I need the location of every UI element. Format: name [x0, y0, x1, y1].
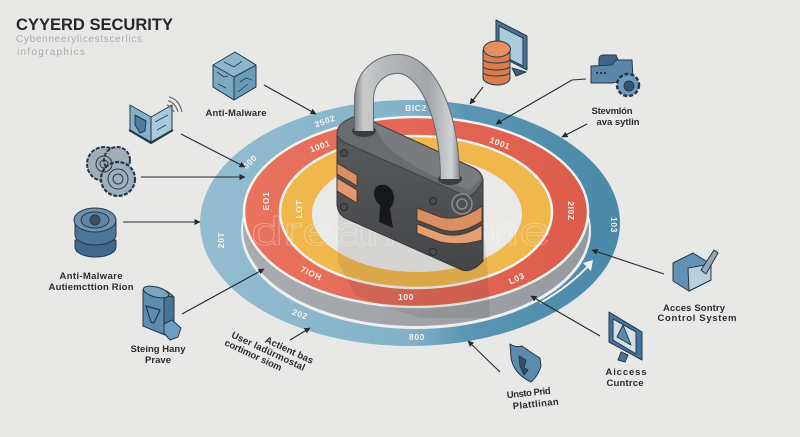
icon: circuit cube [213, 52, 256, 100]
white base line [241, 133, 591, 329]
right copper bands [417, 206, 482, 244]
label: anti-malware authentication [48, 271, 134, 293]
ring numbers: 20T [216, 232, 226, 248]
ring numbers: 202 [291, 307, 309, 322]
label: unsto prid: Unsto Prid [506, 386, 551, 401]
red ring [244, 117, 588, 307]
icon: database and monitor [483, 20, 527, 85]
grey platform side [243, 132, 589, 326]
padlock [337, 64, 483, 271]
icon: server disc [74, 208, 116, 257]
icon: access box with pen [673, 250, 718, 291]
ring numbers: 103 [609, 217, 619, 233]
label: access control system: Acces Sontry [663, 303, 726, 314]
keyhole [374, 185, 394, 228]
left copper bands [337, 163, 357, 203]
ring numbers: EO1 [261, 192, 271, 210]
label: rotated user caption: Actient bas [263, 335, 315, 367]
ring numbers: 2I0Z [566, 201, 576, 221]
icon: folders and gear [591, 55, 639, 96]
ring numbers: 800 [409, 332, 425, 342]
label: steing hany prave [130, 344, 186, 366]
label: unsto prid: Plattlinan [512, 397, 559, 412]
outer blue ring [200, 100, 620, 346]
yellow ring [280, 136, 552, 288]
label: access control system [658, 303, 736, 324]
watermark: dreamstime [251, 210, 551, 254]
icon: monitor [609, 312, 642, 362]
ring numbers: 1001 [488, 135, 512, 152]
label: anti-malware authentication: Anti-Malware [60, 271, 122, 282]
ring numbers: BIC2 [405, 103, 427, 113]
label: stevmlon: Stevmlón [592, 106, 633, 117]
shackle [364, 64, 450, 179]
label: access centre: Aiccess [606, 367, 646, 378]
icon: laptop with shield [129, 97, 182, 143]
ring numbers: 7IOH [299, 264, 323, 283]
ring numbers [216, 103, 619, 342]
ring numbers: 100 [398, 292, 414, 302]
curved white arrow [540, 260, 593, 303]
concentric ring diagram [200, 100, 620, 346]
label: access centre [606, 367, 646, 389]
title: CYYERD SECURITY [16, 15, 174, 34]
top highlight [372, 122, 481, 190]
label: rotated user caption: User ladürmostal [229, 330, 307, 374]
label: rotated user caption: cortimor siom [223, 338, 283, 374]
swirl mark [452, 194, 472, 214]
ring numbers: LOT [294, 199, 304, 218]
lock top face [337, 116, 483, 197]
label: access control system: Control System [658, 313, 736, 324]
screws [340, 150, 436, 256]
label: anti-malware: Anti-Malware [206, 108, 266, 119]
ring numbers: L03 [507, 270, 526, 286]
lock front face [337, 135, 483, 271]
label: access centre: Cuntrce [606, 378, 644, 389]
icon: shield [510, 344, 541, 382]
ring numbers: 000 [241, 153, 259, 171]
subtitle: Cybenneerylicestscerlics [16, 34, 142, 45]
ring numbers: 1001 [308, 138, 332, 155]
leader arrows [123, 79, 664, 372]
lock shadow [338, 205, 490, 318]
icon: gears [87, 147, 135, 196]
shackle collars [352, 125, 462, 185]
icon: cylinder with shield [142, 284, 181, 340]
label: steing hany prave: Prave [145, 355, 171, 366]
ring numbers: 2502 [313, 113, 337, 130]
label: stevmlon: ava sytlin [596, 117, 640, 128]
inner white disc [312, 156, 522, 272]
label: stevmlon [592, 106, 640, 128]
label: anti-malware authentication: Autiemcttion Rion [48, 282, 134, 293]
label: unsto prid [506, 386, 559, 412]
subtitle: infographics [17, 47, 85, 58]
label: steing hany prave: Steing Hany [130, 344, 186, 355]
subtitle [16, 34, 142, 58]
